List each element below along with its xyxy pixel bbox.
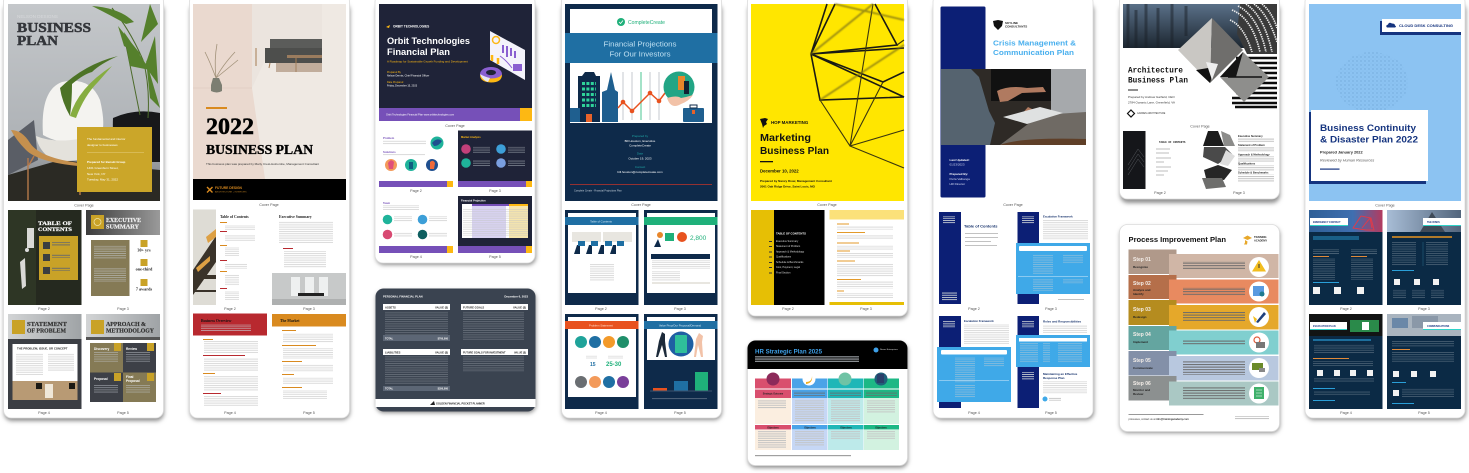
cover page: Prepared by Nancy Drew, Management Consultant [760, 179, 832, 183]
cover page: Bill Houston, Executive [625, 139, 656, 143]
step 03: Step 03 [1133, 307, 1151, 313]
card background [1120, 0, 1280, 203]
table: future goals for investment [461, 349, 528, 372]
caption: Page 4 [968, 411, 980, 415]
table: liabilities: $350,000 [438, 388, 449, 390]
cover page: CLOUD DESK CONSULTING [1399, 24, 1453, 28]
page 4: evacuation plan: EVACUATION PLAN [1313, 325, 1336, 328]
step 05: Communicate [1133, 366, 1153, 370]
cover page photo: Prepared for Benski Group [87, 160, 126, 164]
page 5: approach and methodology: Proposal [126, 379, 140, 383]
cover page photo [8, 4, 160, 201]
caption: Page 5 [674, 411, 686, 415]
caption: Page 2 [410, 189, 422, 193]
step 02: Identify [1133, 292, 1144, 296]
page 3: escalation framework [1016, 212, 1090, 304]
page 5: roles and responsibilities: Response Plan [1043, 376, 1065, 380]
cover page photo [193, 4, 346, 200]
card: personal financial plan table [376, 288, 536, 413]
cover page: HOP MARKETING [771, 120, 809, 125]
cover page [751, 4, 904, 201]
page 5: communications [1387, 314, 1461, 409]
page 3: market dark: Market Analysis [461, 135, 481, 139]
table: future goals: VALUE ($) [513, 306, 526, 310]
cover page: Prepared By: [950, 172, 968, 176]
page 4: escalation framework continued: Escalation Framework [964, 319, 994, 323]
table: liabilities: VALUE ($) [435, 350, 448, 354]
card background [375, 0, 536, 265]
black header [748, 340, 908, 369]
card: Skyline Consultants crisis plan [933, 0, 1094, 420]
page 5: financial projection table: Financial Projection [461, 198, 486, 202]
page 4: problem statement: Problem Statement [589, 324, 613, 328]
page 2: table of contents: Cost, Payment, Legal [776, 266, 800, 269]
page 2: table of contents [193, 209, 266, 305]
page 2: overview: Problem [383, 136, 395, 140]
page 2: overview: Solutions [383, 150, 396, 154]
page 5: roles and responsibilities: Roles and Responsibilities [1043, 320, 1082, 324]
caption: Page 3 [860, 307, 872, 311]
page 3: proposal text [830, 210, 904, 305]
page 4: team: Team [383, 201, 391, 205]
page 3: escalation framework: Escalation Framework [1043, 214, 1073, 218]
page 3: executive summary: 7 awards [136, 286, 152, 292]
page 3: key numbers: 2,800 [690, 235, 707, 242]
cover page: Perla Valbanga [950, 177, 970, 181]
column: strategic outcomes [755, 372, 791, 450]
cover page: 2061 Oak Ridge Drive, Saint Louis, MO [760, 184, 816, 188]
page 2: table of contents: TABLE OF CONTENTS [1159, 141, 1186, 144]
table: assets: TOTAL [385, 338, 394, 340]
cover page: Business Plan [1128, 76, 1188, 86]
page 3: executive summary: Executive Summary [279, 215, 312, 219]
caption: Cover Page [817, 203, 837, 207]
caption: Page 5 [489, 255, 501, 259]
page 2: overview [379, 136, 453, 187]
column: systems [864, 372, 899, 450]
column: systems: Objectives [875, 426, 888, 430]
page 5: approach and methodology [86, 314, 160, 402]
card: Process improvement plan [1120, 224, 1280, 433]
cover page: HR Director [950, 182, 965, 186]
page 3: the risks [1387, 210, 1461, 305]
cover page: 01/23/2023 [950, 162, 965, 166]
cover page photo: designer to businesses [87, 143, 118, 147]
cover page: 2784 Oceanic Lane, Greenfield, VA [1128, 100, 1175, 104]
step 01: Recognize [1133, 265, 1148, 269]
card: Orbit Technologies financial plan [375, 0, 536, 265]
cover page: Business Plan [760, 146, 829, 157]
cover page photo: BUSINESS PLAN [206, 143, 313, 158]
page 2: table of contents: Final Section [776, 272, 791, 274]
step 04: Implement [1133, 340, 1148, 344]
page 2: table of contents: Schedule & Benchmarks [776, 261, 804, 264]
table: liabilities [383, 349, 450, 391]
page 2: table of contents [939, 212, 998, 304]
footer strip [376, 399, 536, 407]
cover page: GARDEN ARCHITECTURE [1137, 112, 1166, 115]
card background [562, 0, 722, 420]
step 02 [1128, 275, 1278, 304]
cover page: CompleteCreate [628, 20, 665, 26]
caption: Page 5 [1045, 411, 1057, 415]
cover page photo: FUTURE DESIGN [215, 186, 243, 190]
cover page photo: 2022 [206, 114, 254, 139]
page 3: executive summary: EXECUTIVE [106, 218, 141, 224]
page 3: the risks: THE RISKS [1427, 221, 1440, 224]
footer note: processes, contact us at info@trainingacademy.com [1128, 418, 1189, 421]
table: future goals for investment: VALUE ($) [514, 352, 526, 354]
cover page: Crisis Management & [993, 38, 1077, 48]
page 3: executive summary: Schedule & Benchmarks [1238, 170, 1269, 174]
caption: Page 4 [595, 411, 607, 415]
cover page: Orbit Technologies [387, 36, 470, 46]
page 5: the market: The Market [280, 319, 300, 323]
card background [933, 0, 1094, 420]
page 3: executive summary [1202, 131, 1274, 189]
cover page [1123, 4, 1277, 117]
table: future goals for investment: FUTURE GOALS FOR INVESTMENT [463, 352, 506, 354]
page 3: executive summary: 30+ yrs [137, 248, 151, 252]
page 2: table of contents: Statement of Problem [776, 245, 800, 248]
step 06 [1128, 376, 1278, 406]
card: Future Design 2022 business plan [190, 0, 350, 420]
cover page: CONSULTANTS [1005, 24, 1027, 28]
cover page: Date [637, 152, 643, 156]
column: employee retention: Objectives [804, 426, 817, 430]
caption: Cover Page [1003, 203, 1023, 207]
page 2: table of contents: Approach & Methodology [776, 250, 805, 254]
step 03 [1128, 300, 1278, 330]
card background [1305, 0, 1466, 420]
cover page photo: The fundamental and interior [87, 137, 125, 141]
caption: Cover Page [1190, 124, 1210, 128]
caption: Page 3 [1233, 191, 1245, 195]
caption: Page 4 [410, 255, 422, 259]
page 2: table of contents: Executive Summary [776, 240, 799, 243]
page 2: emergency contact: EMERGENCY CONTACT [1313, 221, 1341, 224]
column: talent: Objectives [840, 426, 853, 430]
cover page: Marketing [760, 133, 811, 144]
page 4: team [379, 201, 453, 253]
page 5: approach and methodology: Final [126, 375, 134, 379]
cover page: ORBIT TECHNOLOGIES [393, 24, 429, 28]
page 4: problem statement: 15 [590, 362, 596, 368]
page 3: executive summary [86, 210, 160, 296]
cover page: Prepared by Andrew Garfield, CEO [1128, 95, 1175, 99]
page 4: escalation framework continued [937, 316, 1011, 408]
cover page: Communication Plan [993, 48, 1075, 57]
page 2: table of contents: TABLE OF [38, 221, 73, 227]
table: liabilities: LIABILITIES [385, 350, 401, 354]
page 5: solution and bars: Value Prop/Our Proposal/Demand [659, 324, 702, 328]
step 05: Step 05 [1133, 358, 1151, 364]
page 4: problem statement [565, 314, 638, 409]
page 5: approach and methodology: METHODOLOGY [106, 328, 155, 334]
caption: Cover Page [631, 203, 651, 207]
logo: training academy: TRAINING [1254, 235, 1267, 239]
cover page: Prepared by [632, 134, 649, 138]
cover page: Nelson Dennis, Chief Financial Officer [387, 74, 429, 78]
caption: Page 3 [489, 189, 501, 193]
cover page: & Disaster Plan 2022 [1320, 134, 1418, 146]
page 5: the market [272, 314, 346, 399]
logo: training academy: ACADEMY [1254, 238, 1267, 242]
page 5: approach and methodology: Review [126, 347, 138, 351]
caption: Cover Page [74, 204, 94, 208]
step 04 [1128, 326, 1278, 354]
page 2: table of contents: Qualifications [776, 256, 792, 258]
page 3: market dark [458, 130, 532, 187]
page 3: executive summary: one-third [136, 266, 153, 272]
caption: Page 4 [224, 411, 236, 415]
cover page: For Our Investors [610, 50, 671, 58]
step 02: Analyze and [1133, 288, 1151, 292]
cover page: Last Updated: [950, 158, 970, 162]
caption: Page 3 [674, 307, 686, 311]
cover page: Friday, December 15, 2023 [387, 84, 418, 88]
table: liabilities: TOTAL [385, 388, 394, 390]
card: Cloud Desk business continuity plan [1305, 0, 1466, 420]
cover page: A Roadmap for Sustainable Growth Funding and Development [387, 60, 468, 64]
page 3: executive summary: Statement of Problem [1238, 143, 1266, 147]
page 5: approach and methodology: APPROACH & [106, 322, 146, 328]
card: HR strategic plan 2025 [748, 340, 908, 468]
page 5: communications: COMMUNICATIONS [1427, 325, 1450, 328]
cover page: Financial Projections [604, 40, 677, 48]
page 2: table of contents: Table of Contents [964, 224, 998, 228]
cover page [940, 6, 1086, 198]
page 4: statement of problem: THE PROBLEM, ISSUE, OR CONCEPT [17, 346, 68, 350]
cover page: Date Prepared [387, 81, 404, 84]
footer note [1128, 414, 1269, 421]
page 3: executive summary: Qualifications [1238, 162, 1256, 166]
caption: Page 3 [1045, 307, 1057, 311]
card background [4, 0, 164, 421]
caption: Page 4 [38, 411, 50, 415]
caption: Page 2 [968, 307, 980, 311]
cover page [1309, 4, 1461, 201]
logo: training academy [1243, 235, 1267, 244]
page 3: key numbers [644, 210, 718, 305]
card: Hop Marketing business plan [748, 0, 908, 319]
page 2: table of contents: Table of Contents [220, 215, 249, 219]
caption: Page 2 [595, 307, 607, 311]
caption: Page 2 [38, 307, 50, 311]
page 4: business overview: Business Overview [201, 319, 232, 323]
cover page photo: This business plan was prepared by Marty Crest-Holcombe, Management Consultant [206, 162, 319, 166]
caption: Page 4 [1340, 411, 1352, 415]
caption: Page 3 [1418, 307, 1430, 311]
white panel [1120, 224, 1280, 432]
card background [190, 0, 350, 420]
title: Process Improvement Plan [1128, 235, 1226, 244]
page 4: problem statement: 25-30 [606, 362, 622, 368]
page 4: evacuation plan [1309, 314, 1382, 409]
table: assets: ASSETS [385, 306, 396, 310]
page 2: table of contents: CONTENTS [38, 227, 72, 233]
page 3: executive summary: SUMMARY [106, 224, 140, 230]
cover page: Complete Create - Financial Projections Plan [574, 190, 622, 192]
table: assets: $700,000 [438, 338, 449, 340]
page 2: table of contents: Table of Contents [590, 220, 612, 224]
table: future goals [461, 304, 528, 340]
caption: Page 2 [782, 307, 794, 311]
card background [748, 0, 908, 319]
column: talent [828, 372, 864, 450]
card: CompleteCreate financial projections [562, 0, 722, 420]
card: Nelson Designs business plan [4, 0, 164, 421]
step 06: Monitor and [1133, 388, 1150, 392]
page 2: table of contents [751, 210, 824, 305]
plan title: PERSONAL FINANCIAL PLAN [383, 294, 423, 298]
table: future goals: FUTURE GOALS [463, 306, 484, 310]
page 5: financial projection table [458, 196, 532, 253]
cover page: Reviewed by Human Resources [1320, 158, 1374, 162]
step 05 [1128, 351, 1278, 380]
cover page photo: NELSON DESIGNS [17, 14, 58, 19]
step 03: Redesign [1133, 315, 1147, 319]
card: Architecture business plan [1120, 0, 1280, 203]
step 06: Step 06 [1133, 381, 1151, 387]
cover page: December 10, 2022 [760, 168, 799, 174]
caption: Page 5 [117, 411, 129, 415]
column: strategic outcomes: Objectives [767, 426, 780, 430]
black header: Nexus Enterprises [880, 348, 899, 351]
caption: Cover Page [1375, 204, 1395, 208]
caption: Page 5 [1418, 411, 1430, 415]
column: employee retention [792, 372, 828, 450]
footer note [755, 455, 851, 456]
caption: Cover Page [445, 124, 465, 128]
cover page: October 19, 2023 [628, 156, 652, 160]
page 2: table of contents [8, 210, 82, 305]
page 4: statement of problem: OF PROBLEM [27, 328, 66, 334]
page 5: approach and methodology: Discovery [94, 347, 109, 351]
caption: Page 5 [303, 411, 315, 415]
step 04: Step 04 [1133, 332, 1151, 338]
caption: Page 2 [224, 307, 236, 311]
page 2: emergency contact [1309, 210, 1382, 305]
cover page photo: ARCHITECTURE + INTERIORS [215, 190, 247, 194]
page 4: statement of problem: STATEMENT [27, 322, 67, 328]
cover page: Orbit Technologies Financial Plan www.orbittechnologies.com [386, 114, 454, 116]
page 2: table of contents [565, 210, 638, 305]
page 5: roles and responsibilities: Maintaining an Effective [1043, 372, 1078, 376]
cover page: Contact [635, 165, 645, 169]
cover page [565, 4, 718, 201]
page 3: executive summary: Executive Summary [1238, 134, 1263, 138]
table: assets [383, 304, 450, 341]
page 2: table of contents: TABLE OF CONTENTS [776, 232, 806, 236]
step 01 [1128, 250, 1278, 278]
cover page: Prepared By [387, 71, 402, 74]
cover page: bill.houston@completecreate.com [617, 170, 663, 174]
page 5: approach and methodology: Proposal [94, 377, 108, 381]
page 2: table of contents [1123, 131, 1186, 189]
caption: Cover Page [259, 203, 279, 207]
dark panel [376, 288, 536, 412]
page 4: business overview [193, 314, 267, 406]
page 4: statement of problem [8, 314, 82, 409]
cover page photo: New York, NY [87, 172, 106, 176]
cover page: Financial Plan [387, 47, 450, 57]
black header: HR Strategic Plan 2025 [755, 348, 822, 356]
caption: Page 3 [303, 307, 315, 311]
cover page: CompleteCreate [629, 144, 651, 148]
cover page photo: BUSINESS [17, 20, 91, 35]
cover page [379, 4, 532, 121]
page 3: executive summary [272, 215, 346, 305]
cover page: Business Continuity [1320, 123, 1417, 134]
cover page photo: PLAN [17, 33, 58, 48]
step 06: Review [1133, 392, 1144, 396]
date: December 6, 2023 [504, 294, 528, 298]
step 01: Step 01 [1133, 257, 1151, 263]
page 5: solution and bars [644, 314, 718, 409]
column: strategic outcomes: Strategic Outcome [763, 392, 784, 396]
step 02: Step 02 [1133, 281, 1151, 287]
table: assets: VALUE ($) [435, 306, 448, 310]
page 3: executive summary: Approach & Methodology [1238, 152, 1270, 156]
cover page: Prepared January 2022 [1320, 150, 1363, 154]
caption: Page 2 [1154, 191, 1166, 195]
cover page: SKYLINE [1005, 21, 1018, 25]
cover page photo: Tuesday, May 31, 2022 [87, 178, 118, 182]
caption: Page 2 [1340, 307, 1352, 311]
white panel [748, 340, 908, 466]
footer strip: GOLDEN FINANCIAL POCKET PLANNER [436, 402, 485, 406]
caption: Page 3 [117, 307, 129, 311]
cover page: Architecture [1128, 66, 1183, 76]
page 5: roles and responsibilities [1016, 316, 1090, 408]
cover page photo: 1401 Greenburn Street, [87, 166, 119, 170]
